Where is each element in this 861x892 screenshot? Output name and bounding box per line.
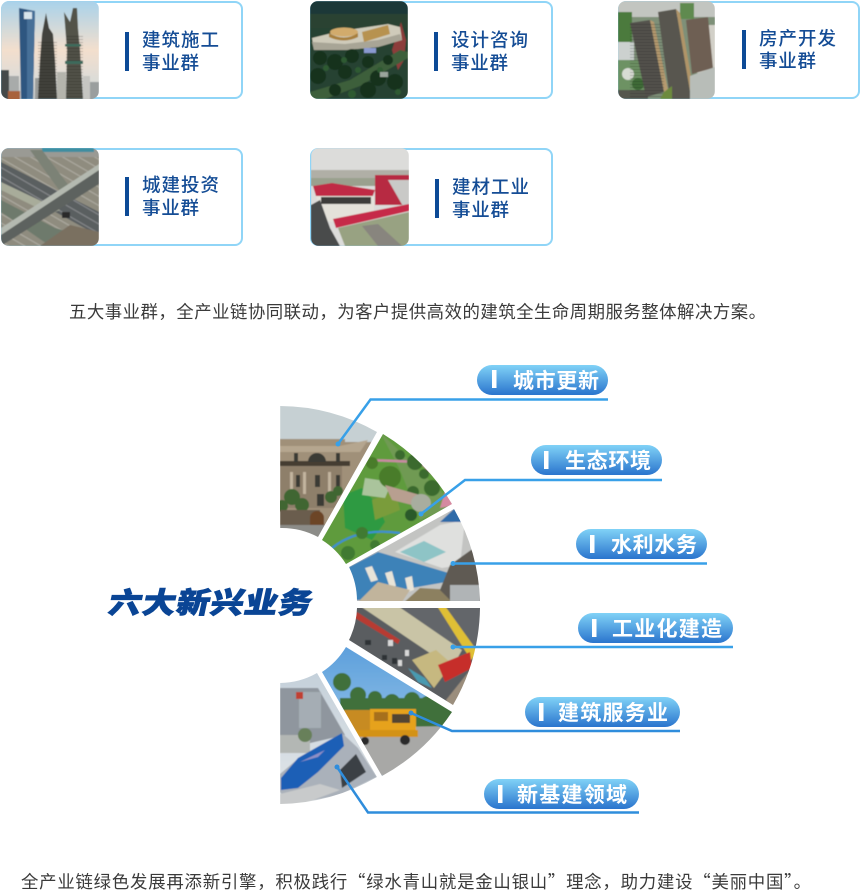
- panel: 城建投资事业群: [1, 148, 242, 246]
- callout: 新基建领域: 新基建领域: [517, 779, 627, 809]
- label: 房产开发: [759, 25, 836, 51]
- photo: Shanghai skyscrapers: [1, 1, 99, 100]
- callout: 生态环境: [418, 445, 662, 516]
- panel: 设计咨询事业群: 事业群: [451, 50, 508, 76]
- panel: 建材工业事业群: 事业群: [452, 196, 509, 222]
- sector: water conservancy photo: [349, 509, 480, 601]
- sector: ecological environment photo: [322, 434, 452, 564]
- label: 建筑施工: [142, 26, 219, 52]
- panel: 建材工业事业群: [311, 148, 552, 246]
- photo: theatre in park: [310, 1, 408, 99]
- callout: 建筑服务业: [408, 697, 680, 731]
- callout: 水利水务: 水利水务: [611, 529, 697, 559]
- chart: six emerging businesses fan: [105, 400, 485, 810]
- accent bar: [434, 32, 438, 71]
- sector: industrial construction photo: [349, 608, 480, 705]
- panel: 房产开发事业群: 事业群: [759, 48, 816, 74]
- callout: 水利水务: [450, 529, 707, 566]
- label: 设计咨询: [451, 26, 528, 52]
- sector: construction services photo: [322, 647, 452, 776]
- accent bar: [125, 177, 129, 216]
- label: 建材工业: [452, 174, 529, 200]
- panel: 城建投资事业群: 事业群: [142, 194, 199, 220]
- accent bar: [742, 30, 746, 69]
- sector: new infrastructure photo: [280, 670, 380, 810]
- callout: 城市更新: 城市更新: [513, 365, 599, 395]
- callout: 工业化建造: 工业化建造: [612, 613, 722, 643]
- panel: 建筑施工事业群: 事业群: [142, 50, 199, 76]
- callout: 城市更新: [336, 365, 608, 446]
- text block: intro caption: 五大事业群，全产业链协同联动，为客户提供高效的建筑全生命周期服务整体解决方案。: [69, 299, 766, 324]
- title: 六大新兴业务: 六大新兴业务: [105, 581, 317, 622]
- panel: 建筑施工事业群: [1, 1, 242, 100]
- photo: highway interchange: [1, 148, 99, 246]
- callout: 生态环境: 生态环境: [565, 445, 651, 475]
- callout: 建筑服务业: 建筑服务业: [558, 697, 668, 727]
- sector: urban renewal photo: [280, 406, 377, 537]
- accent bar: [125, 32, 129, 71]
- accent bar: [435, 179, 439, 218]
- photo: red factory: [311, 148, 409, 246]
- callout: 工业化建造: [450, 613, 733, 650]
- callout: 新基建领域: [334, 764, 639, 812]
- panel: 房产开发事业群: [618, 1, 859, 99]
- panel: 设计咨询事业群: [310, 1, 552, 99]
- photo: three residential towers: [618, 1, 715, 99]
- label: 城建投资: [142, 172, 219, 198]
